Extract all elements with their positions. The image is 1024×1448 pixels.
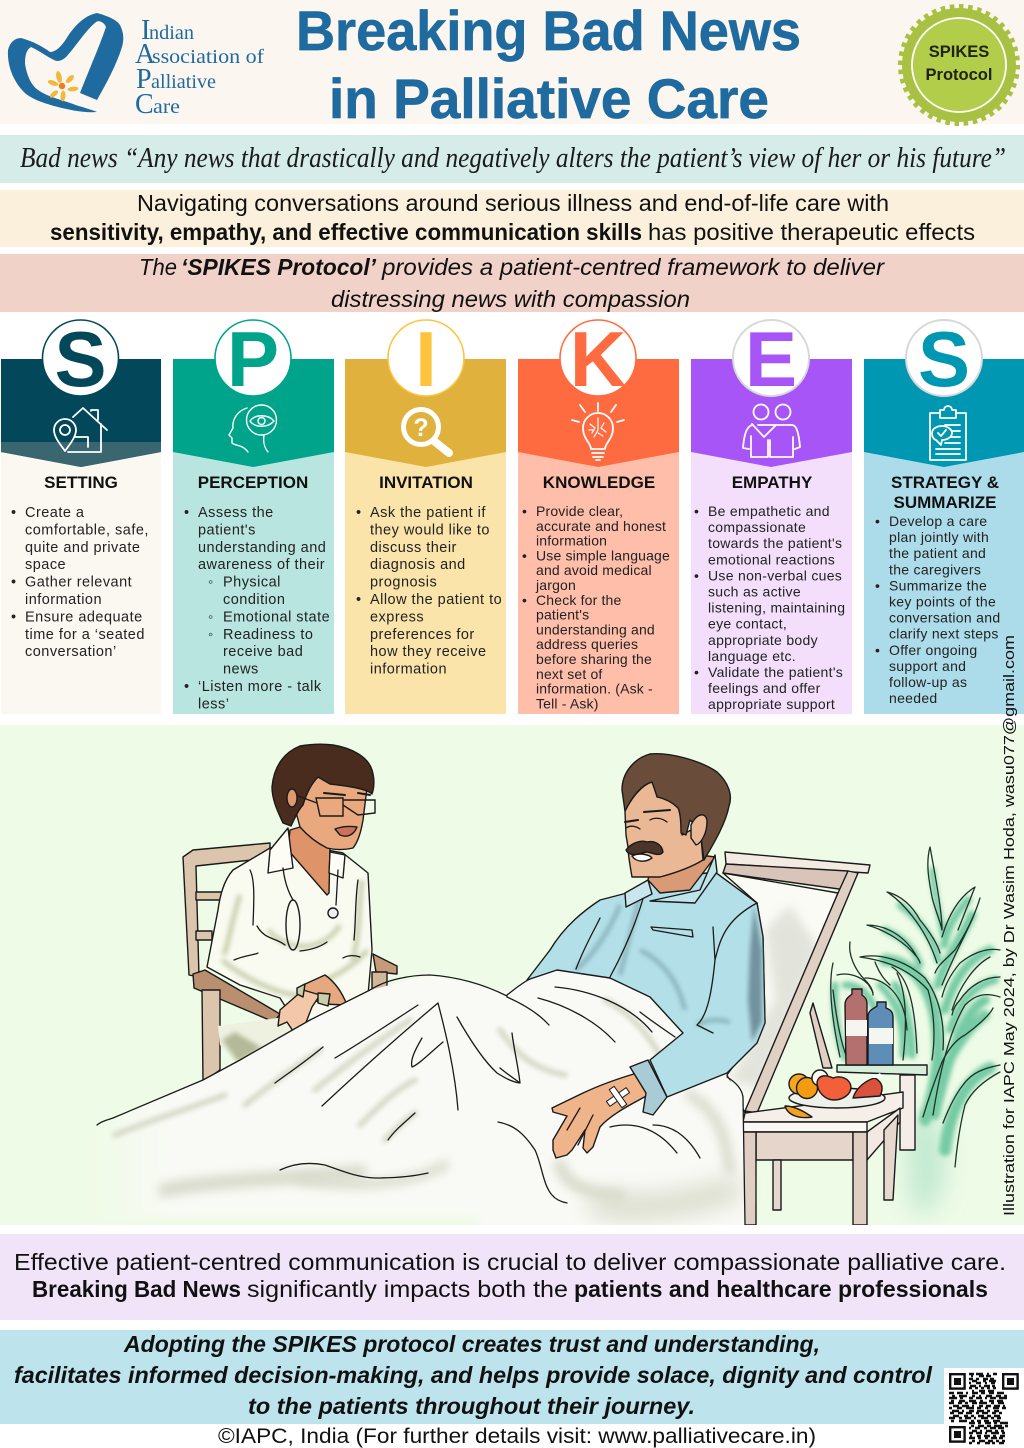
list: knowledge points: • (522, 547, 527, 563)
list: setting points: space (25, 557, 66, 573)
list: perception points: Emotional state (223, 609, 330, 625)
list: empathy points: appropriate support (708, 696, 835, 712)
band: adopting the SPIKES protocol: to the patients throughout their journey. (248, 1393, 695, 1419)
title: in Palliative Care (329, 67, 769, 130)
icon: head with eye (229, 405, 276, 452)
list: knowledge points: accurate and honest (536, 518, 666, 534)
list: perception points: awareness of their (198, 557, 325, 573)
list: perception points: Readiness to (223, 627, 313, 643)
list: knowledge points: understanding and (536, 621, 655, 637)
bedside table (743, 1092, 903, 1225)
panel: S Setting: S (54, 315, 107, 403)
panel: P Perception: P (227, 315, 279, 403)
footer text: ©IAPC, India (For further details visit: www.palliativecare.in) (218, 1425, 816, 1448)
heading: STRATEGY & SUMMARIZE: SUMMARIZE (894, 493, 996, 512)
list: knowledge points: Check for the (536, 592, 622, 608)
list: perception points: patient's (198, 522, 256, 538)
list: perception points: receive bad (223, 644, 303, 660)
list: strategy points: follow-up as (889, 674, 967, 690)
heading: EMPATHY: EMPATHY (732, 473, 813, 492)
list: knowledge points: Provide clear, (536, 503, 623, 519)
logo text: alliative (151, 72, 216, 93)
list: strategy points: needed (889, 690, 938, 706)
list: invitation points: Ask the patient if (370, 505, 486, 521)
logo text: A (135, 39, 156, 70)
list: knowledge points: before sharing the (536, 651, 652, 667)
medicine bottles (845, 989, 893, 1065)
list: empathy points: such as active (708, 584, 801, 600)
list: setting points: Gather relevant (25, 575, 132, 591)
list: invitation points: Allow the patient to (370, 592, 502, 608)
protocol band: SPIKES framework statement: ‘SPIKES Protocol’ (181, 254, 377, 280)
list: invitation points: how they receive (370, 644, 486, 660)
heading: PERCEPTION: PERCEPTION (198, 473, 308, 492)
list: knowledge points: • (522, 592, 527, 608)
list: invitation points: • (356, 592, 362, 608)
list: knowledge points: address queries (536, 636, 638, 652)
band: effective communication statement: Effective patient-centred communication is crucial to deliver compassionate palliative care. (14, 1249, 1006, 1275)
list: empathy points: listening, maintaining (708, 600, 845, 616)
panel: S Setting (1, 315, 161, 714)
blanket (60, 970, 745, 1232)
heading: KNOWLEDGE: KNOWLEDGE (543, 473, 655, 492)
list: strategy points: • (875, 513, 880, 529)
list: empathy points: language etc. (708, 648, 796, 664)
bedside table back shelf (837, 1065, 927, 1150)
list: setting points: • (11, 575, 17, 591)
protocol band: SPIKES framework statement (0, 254, 1024, 312)
illustration: doctor talking with patient in bed (0, 725, 1024, 1232)
list: perception points: • (184, 679, 190, 695)
list: perception points: understanding and (198, 540, 326, 556)
list: perception points: Physical (223, 575, 281, 591)
badge: SPIKES Protocol: SPIKES (929, 43, 989, 61)
list: empathy points: Validate the patient's (708, 664, 843, 680)
badge: SPIKES Protocol (901, 7, 1017, 123)
icon: two people embracing (743, 404, 800, 457)
list: knowledge points: Use simple language (536, 547, 670, 563)
list: setting points: conversation’ (25, 644, 117, 660)
list: knowledge points: patient's (536, 607, 589, 623)
panel: K Knowledge (518, 315, 679, 714)
panel: E Empathy (691, 315, 852, 714)
doctor's hands (278, 975, 347, 1034)
list: strategy points: • (875, 577, 880, 593)
fruit plate (785, 1070, 885, 1118)
logo: Indian Association of Palliative Care (8, 13, 265, 120)
list: empathy points: • (694, 664, 699, 680)
intro band: navigating conversations (0, 190, 1024, 247)
plant (831, 847, 1000, 1215)
list: empathy points: Use non-verbal cues (708, 567, 842, 583)
protocol band: SPIKES framework statement: The (139, 254, 177, 280)
list: empathy points: compassionate (708, 519, 806, 535)
badge: SPIKES Protocol: Protocol (926, 66, 992, 84)
list: setting points: • (11, 505, 17, 521)
list: empathy points: emotional reactions (708, 551, 835, 567)
intro band: navigating conversations: sensitivity, empathy, and effective communication skills (50, 219, 642, 245)
panel: K Knowledge: K (570, 315, 626, 403)
list: strategy points: the caregivers (889, 561, 981, 577)
patient's neck, head and collar (622, 754, 730, 907)
list: empathy points: • (694, 567, 699, 583)
list: knowledge points: information. (Ask - (536, 681, 653, 697)
list: strategy points: key points of the (889, 594, 996, 610)
logo flower (47, 71, 79, 102)
list: strategy points: Summarize the (889, 577, 987, 593)
list: empathy points: towards the patient's (708, 535, 842, 551)
list: setting points: comfortable, safe, (25, 522, 149, 538)
list: invitation points: information (370, 662, 447, 678)
bed frame and backrest (723, 852, 870, 1113)
icon: clipboard with speech bubble (930, 406, 966, 460)
icon: magnifying glass with question mark: ? (413, 414, 429, 442)
list: knowledge points: next set of (536, 666, 602, 682)
stethoscope (283, 868, 338, 950)
list: strategy points: Develop a care (889, 513, 987, 529)
list: setting points: time for a ‘seated (25, 627, 145, 643)
heading: INVITATION: INVITATION (379, 473, 473, 492)
list: knowledge points: information (536, 533, 607, 549)
list: strategy points: clarify next steps (889, 626, 999, 642)
logo text: P (136, 64, 152, 95)
panel: P Perception (173, 315, 335, 714)
logo text: ndian (149, 23, 194, 44)
panel: I Invitation: I (415, 315, 437, 403)
QR code (944, 1368, 1024, 1448)
list: empathy points: Be empathetic and (708, 503, 830, 519)
list: perception points: ◦ (208, 627, 214, 643)
list: perception points: • (184, 505, 190, 521)
list: invitation points: preferences for (370, 627, 475, 643)
panel: S Strategy and Summarize (864, 315, 1024, 714)
icon: magnifying glass with question mark (404, 410, 449, 453)
list: setting points: information (25, 592, 102, 608)
intro band: navigating conversations: Navigating conversations around serious illness and end-of-life care with (137, 190, 889, 216)
logo text: I (141, 15, 150, 46)
list: setting points: Create a (25, 505, 85, 521)
quote band: definition of bad news (0, 135, 1024, 183)
list: empathy points: feelings and offer (708, 680, 821, 696)
header band (0, 0, 1024, 130)
panel: I Invitation (345, 315, 507, 714)
band: adopting the SPIKES protocol (0, 1330, 1024, 1424)
list: invitation points: express (370, 609, 424, 625)
list: invitation points: they would like to (370, 522, 490, 538)
list: perception points: condition (223, 592, 285, 608)
vertical credit text: Illustration for IAPC May 2024, by Dr Wasim Hoda, wasu077@gmail.com (1002, 635, 1018, 1216)
band: adopting the SPIKES protocol: Adopting the SPIKES protocol creates trust and understanding, (123, 1331, 820, 1357)
list: knowledge points: and avoid medical (536, 562, 652, 578)
list: strategy points: Offer ongoing (889, 642, 977, 658)
list: strategy points: the patient and (889, 545, 986, 561)
band: effective communication statement: significantly impacts both the (247, 1276, 568, 1302)
list: empathy points: • (694, 503, 699, 519)
list: perception points: less’ (198, 696, 229, 712)
panel: E Empathy: E (745, 315, 797, 403)
list: strategy points: conversation and (889, 610, 1000, 626)
band: effective communication statement (0, 1234, 1024, 1320)
intro band: navigating conversations: has positive therapeutic effects (648, 219, 975, 245)
logo ribbon heart (8, 13, 123, 112)
protocol band: SPIKES framework statement: provides a patient-centred framework to deliver (381, 254, 885, 280)
logo text: are (153, 97, 180, 118)
heading: STRATEGY & SUMMARIZE (891, 473, 999, 512)
logo text (135, 15, 265, 120)
list: strategy points: support and (889, 658, 966, 674)
doctor (207, 744, 375, 1066)
list: setting points: • (11, 609, 17, 625)
protocol band: SPIKES framework statement: distressing news with compassion (331, 286, 690, 312)
doctor's chair (183, 843, 397, 1082)
logo text: ssociation of (152, 47, 265, 68)
panel: S Strategy and Summarize: S (918, 315, 970, 403)
list: perception points: ◦ (208, 575, 214, 591)
icon: house and location pin (54, 408, 107, 452)
list: perception points: ‘Listen more - talk (198, 679, 322, 695)
list: perception points: ◦ (208, 609, 214, 625)
list: perception points: Assess the (198, 505, 274, 521)
list: empathy points: eye contact, (708, 616, 787, 632)
title (296, 0, 801, 130)
band: adopting the SPIKES protocol: facilitates informed decision-making, and helps provide solace, dignity and control (14, 1362, 932, 1388)
band: effective communication statement: patients and healthcare professionals (574, 1276, 988, 1302)
list: setting points: quite and private (25, 540, 140, 556)
patient's cuff and hand (552, 1060, 667, 1158)
patient's shirt (527, 872, 765, 1097)
list: knowledge points: Tell - Ask) (536, 695, 599, 711)
band: effective communication statement: Breaking Bad News (32, 1276, 241, 1302)
list: invitation points: prognosis (370, 575, 437, 591)
heading: STRATEGY & SUMMARIZE: STRATEGY & (891, 473, 999, 492)
list: setting points: Ensure adequate (25, 609, 143, 625)
icon: light bulb with brain (572, 403, 624, 460)
heading: SETTING: SETTING (44, 473, 118, 492)
list: invitation points: discuss their (370, 540, 457, 556)
title: Breaking Bad News (296, 0, 801, 62)
list: knowledge points: jargon (535, 577, 576, 593)
list: invitation points: diagnosis and (370, 557, 466, 573)
list: knowledge points: • (522, 503, 527, 519)
list: strategy points: • (875, 642, 880, 658)
list: perception points: news (223, 662, 259, 678)
list: strategy points: plan jointly with (889, 529, 989, 545)
list: invitation points: • (356, 505, 362, 521)
list: empathy points: appropriate body (708, 632, 818, 648)
logo text: C (135, 89, 154, 120)
